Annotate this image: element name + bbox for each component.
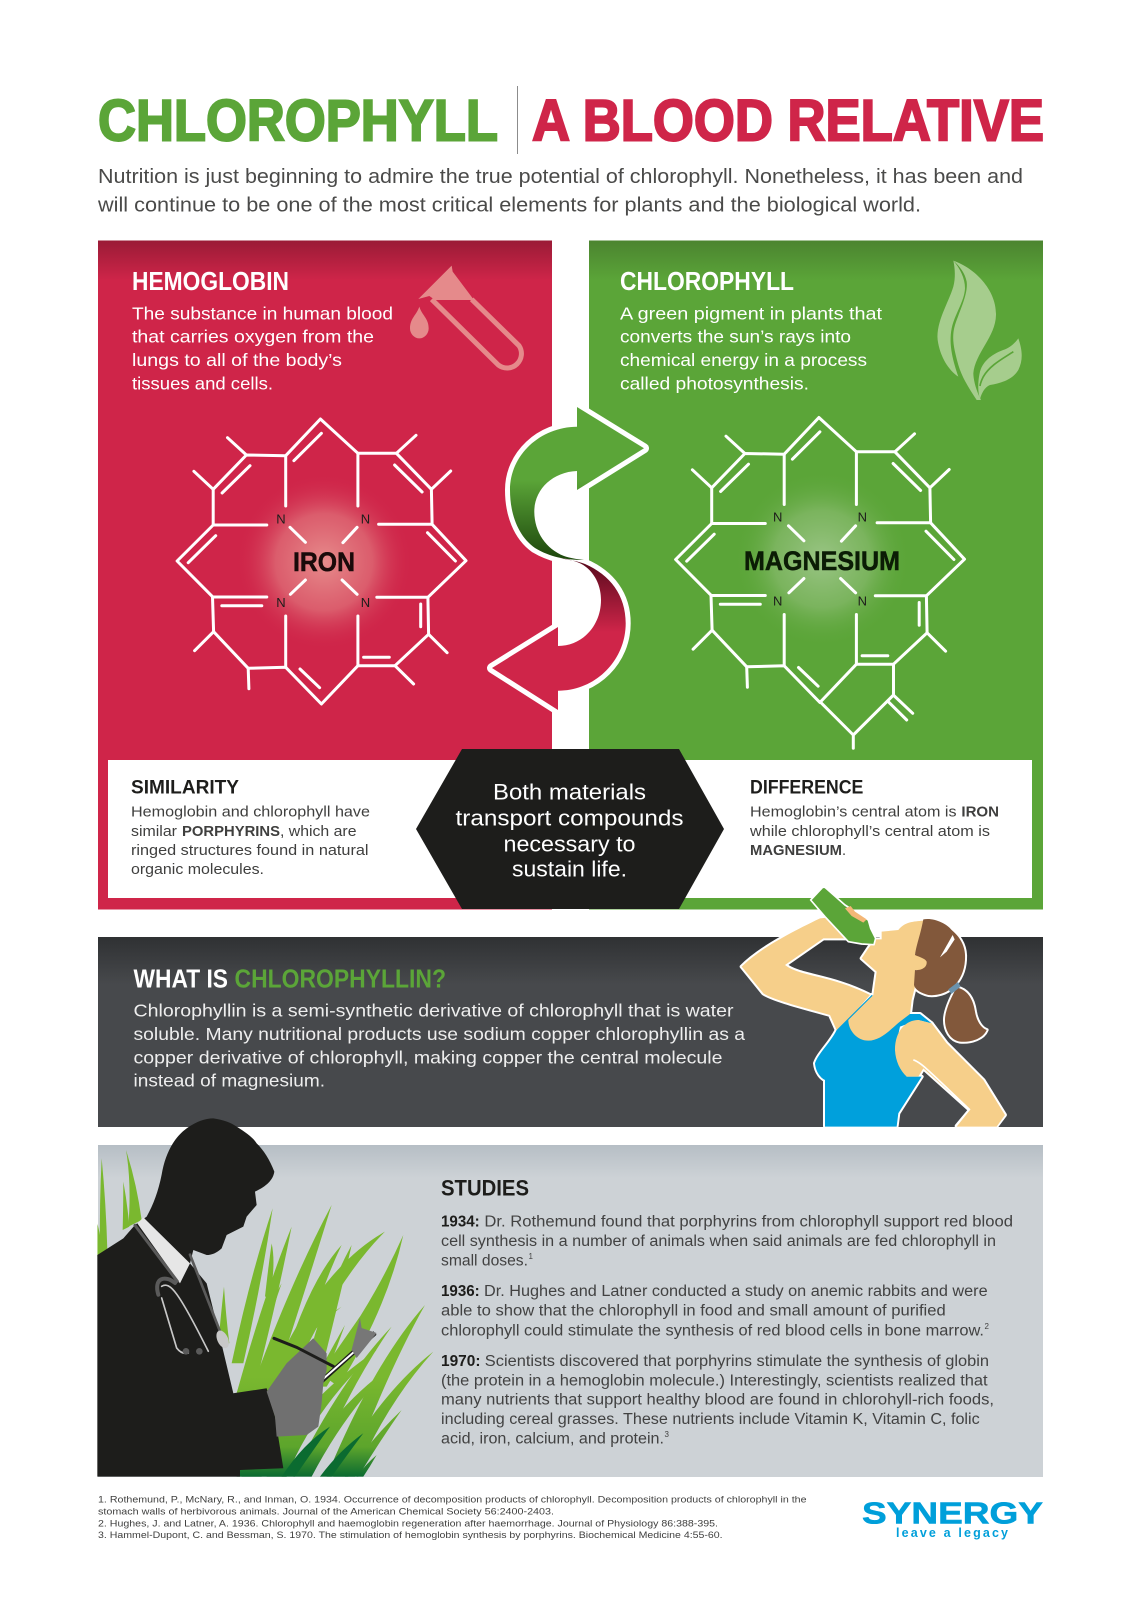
footnotes: 2. Hughes, J. and Latner, A. 1936. Chlorophyll and haemoglobin regeneration after haemorrhage. Journal of Physiology 86:388-395. — [98, 1519, 718, 1530]
nitrogen labels: N — [361, 595, 370, 610]
chlorophyll description: called photosynthesis. — [620, 373, 809, 393]
similarity heading: SIMILARITY — [131, 776, 239, 798]
woman: hair — [914, 919, 965, 995]
study 1936: chlorophyll could stimulate the synthesis of red blood cells in bone marrow. — [441, 1322, 984, 1339]
study 1936: Dr. Hughes and Latner conducted a study on anemic rabbits and were — [484, 1283, 988, 1300]
hemoglobin description — [132, 303, 393, 393]
chlorophyllin heading: WHAT IS — [134, 966, 228, 994]
difference heading: DIFFERENCE — [750, 776, 863, 798]
panel: chlorophyll — [589, 240, 1043, 910]
nitrogen labels — [276, 512, 370, 610]
label: magnesium: MAGNESIUM — [744, 546, 900, 576]
nitrogen labels: N — [858, 594, 867, 608]
nitrogen labels — [773, 510, 867, 608]
study 1970: Scientists discovered that porphyrins stimulate the synthesis of globin — [485, 1353, 989, 1370]
study 1936: 1936: — [441, 1283, 480, 1300]
pen — [274, 1338, 333, 1366]
study 1970: 1970: — [441, 1353, 480, 1370]
molecule glow: iron — [236, 474, 412, 650]
chlorophyll description: A green pigment in plants that — [620, 303, 882, 323]
hemoglobin description: lungs to all of the body’s — [132, 350, 342, 370]
similarity text — [131, 805, 370, 878]
woman: fingers — [845, 906, 867, 923]
chlorophyllin text: Chlorophyllin is a semi-synthetic derivative of chlorophyll that is water — [134, 1001, 734, 1021]
study 1970: (the protein in a hemoglobin molecule.) Interestingly, scientists realized that — [441, 1372, 988, 1389]
study 1934 — [441, 1214, 1013, 1269]
nitrogen labels: N — [773, 594, 782, 608]
nitrogen labels: N — [858, 510, 867, 524]
panel: what is chlorophyllin — [98, 937, 1043, 1127]
intro text — [97, 166, 1023, 217]
stethoscope — [135, 1225, 231, 1355]
study 1936: able to show that the chlorophyll in food and small amount of purified — [441, 1302, 946, 1319]
similarity text: organic molecules. — [131, 862, 264, 878]
molecule: chlorophyll — [676, 418, 964, 748]
chlorophyllin text: instead of magnesium. — [134, 1071, 325, 1091]
logo: synergy — [862, 1496, 1043, 1540]
molecule: hemoglobin — [177, 419, 466, 704]
similarity text: ringed structures found in natural — [131, 843, 368, 859]
icon: exchange arrows — [492, 407, 644, 710]
footnotes: 3. Hammel-Dupont, C. and Bessman, S. 1970. The stimulation of hemoglobin synthesis by porphyrins. Biochemical Medicine 4:55-60. — [98, 1530, 723, 1541]
grass — [97, 1150, 433, 1477]
studies heading: STUDIES — [441, 1175, 529, 1200]
illustration: woman drinking — [742, 887, 1005, 1127]
study 1934: 1934: — [441, 1214, 480, 1231]
similarity text: PORPHYRINS — [182, 824, 280, 840]
study 1936: 2 — [984, 1322, 990, 1331]
study 1934: small doses. — [441, 1252, 528, 1269]
molecule glow: magnesium — [734, 471, 910, 647]
chlorophyll description — [620, 303, 882, 393]
panel: studies — [98, 1145, 1043, 1477]
panel: similarity — [108, 760, 488, 898]
hemoglobin description: tissues and cells. — [132, 373, 273, 393]
title: chlorophyll: CHLOROPHYLL — [98, 88, 498, 154]
intro text: Nutrition is just beginning to admire the true potential of chlorophyll. Nonetheless, it has been and — [98, 166, 1023, 188]
study 1970: acid, iron, calcium, and protein. — [441, 1430, 664, 1447]
doctor hand — [267, 1338, 327, 1437]
footnotes: 1. Rothemund, P., McNary, R., and Inman, O. 1934. Occurrence of decomposition products of chlorophyll. Decomposition products of chlorophyll in the — [98, 1495, 806, 1506]
chlorophyllin text — [134, 1001, 745, 1091]
study 1934: 1 — [528, 1252, 534, 1261]
nitrogen labels: N — [276, 512, 286, 526]
clipboard — [275, 1318, 377, 1423]
label: iron: IRON — [293, 547, 355, 577]
arrow: red — [492, 558, 626, 710]
nitrogen labels: N — [276, 595, 286, 610]
chlorophyll description: chemical energy in a process — [620, 350, 867, 370]
footnotes: stomach walls of herbivorous animals. Journal of the American Chemical Society 56:2400-2403. — [98, 1507, 554, 1518]
difference text: IRON — [961, 805, 999, 821]
woman: face and chest — [848, 921, 928, 1041]
chlorophyll description: converts the sun’s rays into — [620, 327, 851, 347]
difference text: MAGNESIUM — [750, 843, 842, 859]
study 1970: many nutrients that support healthy blood are found in chlorohyll-rich foods, — [441, 1392, 994, 1409]
hemoglobin heading: HEMOGLOBIN — [132, 268, 289, 296]
study 1970 — [441, 1353, 994, 1447]
study 1970: 3 — [664, 1430, 670, 1439]
study 1936 — [441, 1283, 990, 1339]
callout: hexagon — [416, 749, 724, 909]
icon: test tube — [410, 266, 521, 368]
difference text: Hemoglobin’s central atom is — [750, 805, 956, 821]
hemoglobin description: The substance in human blood — [132, 303, 393, 323]
chlorophyll heading: CHLOROPHYLL — [620, 268, 794, 296]
hemoglobin description: that carries oxygen from the — [132, 327, 374, 347]
title divider — [517, 86, 518, 154]
logo tagline: leave a legacy — [896, 1526, 1008, 1540]
doctor silhouette — [97, 1118, 283, 1477]
similarity text: Hemoglobin and chlorophyll have — [131, 805, 370, 821]
chlorophyllin heading: CHLOROPHYLLIN? — [234, 966, 446, 994]
title: a blood relative: A BLOOD RELATIVE — [532, 88, 1044, 154]
nitrogen labels: N — [361, 512, 370, 526]
panel: difference — [660, 760, 1032, 898]
callout text: transport compounds — [456, 805, 684, 830]
footnotes — [98, 1495, 806, 1541]
chlorophyllin heading — [134, 966, 446, 994]
woman: arm — [742, 917, 870, 1030]
intro text: will continue to be one of the most critical elements for plants and the biological world. — [97, 195, 921, 217]
difference text — [749, 805, 999, 859]
arrow: green — [510, 407, 644, 560]
study 1970: including cereal grasses. These nutrients include Vitamin K, Vitamin C, folic — [441, 1411, 980, 1428]
chlorophyllin text: copper derivative of chlorophyll, making copper the central molecule — [134, 1047, 723, 1067]
nitrogen labels: N — [773, 510, 782, 524]
difference text: while chlorophyll’s central atom is — [749, 824, 990, 840]
doctor collar — [137, 1217, 190, 1283]
study 1934: Dr. Rothemund found that porphyrins from chlorophyll support red blood — [484, 1214, 1013, 1231]
similarity text: , which are — [280, 824, 356, 840]
difference text: . — [842, 843, 846, 859]
similarity text: similar — [131, 824, 177, 840]
callout text: sustain life. — [512, 857, 627, 882]
woman: bottle — [811, 887, 876, 945]
icon: leaf — [938, 261, 1022, 400]
callout text: Both materials — [493, 779, 646, 804]
woman: right arm — [895, 1020, 1005, 1127]
callout text: necessary to — [504, 832, 636, 856]
callout text — [456, 779, 684, 882]
title — [98, 86, 1044, 154]
woman: tank top — [815, 995, 932, 1127]
study 1934: cell synthesis in a number of animals when said animals are fed chlorophyll in — [441, 1233, 996, 1250]
woman: ponytail — [945, 987, 987, 1042]
chlorophyllin text: soluble. Many nutritional products use sodium copper chlorophyllin as a — [134, 1024, 745, 1044]
logo: synergy: SYNERGY — [862, 1496, 1043, 1530]
panel: hemoglobin — [98, 240, 552, 910]
illustration: doctor in grass — [97, 1118, 433, 1477]
